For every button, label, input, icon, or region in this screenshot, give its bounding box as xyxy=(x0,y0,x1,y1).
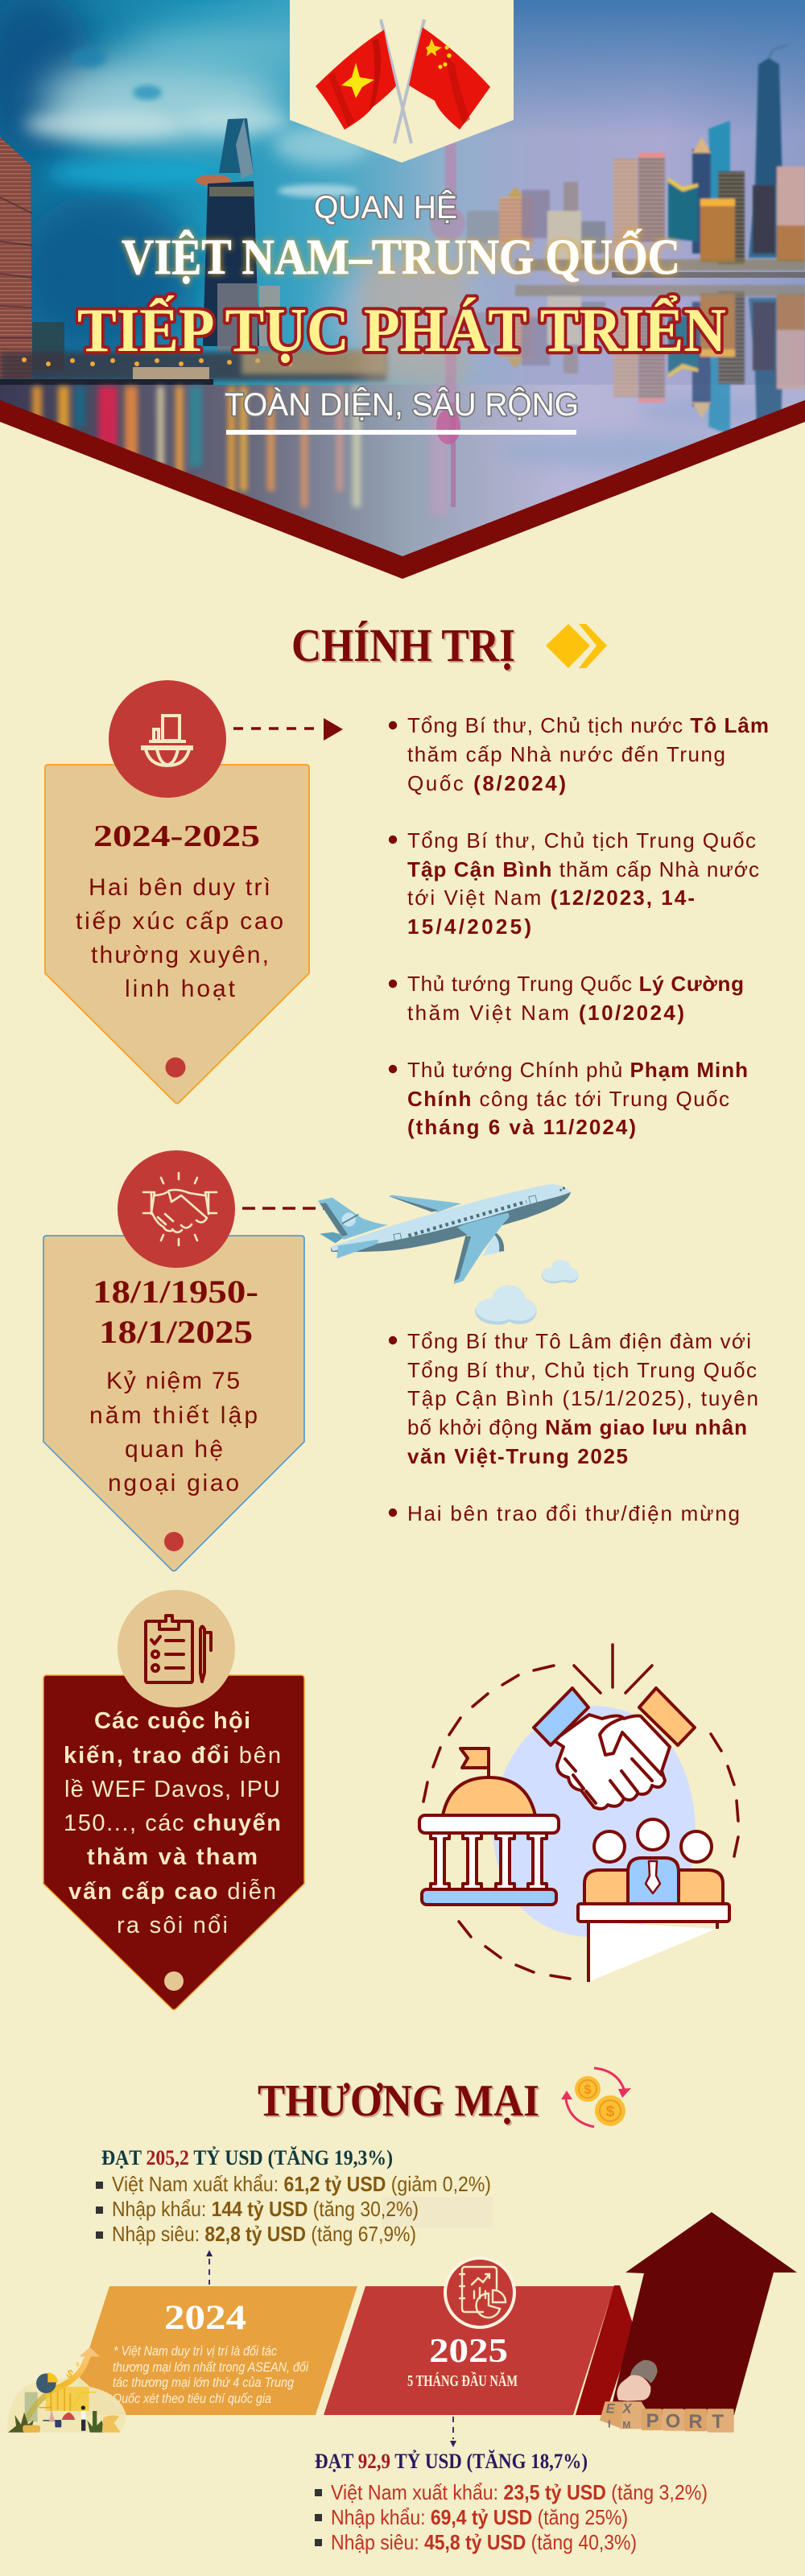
footnote: tác thương mại lớn thứ 4 của Trung xyxy=(113,2376,295,2390)
card text: vấn cấp cao diễn xyxy=(68,1878,276,1905)
text block: 2024 trade figures xyxy=(96,2146,493,2246)
text block: political visits: Quốc (8/2024) xyxy=(407,771,566,795)
illustration: hand and import cubes: E xyxy=(606,2401,616,2416)
card text: quan hệ xyxy=(125,1436,223,1463)
card heading: 2024-2025 xyxy=(93,819,260,853)
flag poles xyxy=(381,19,424,143)
text block: political visits: (tháng 6 và 11/2024) xyxy=(407,1115,636,1139)
text block: political visits: Tập Cận Bình thăm cấp Nhà nước xyxy=(407,857,759,881)
card text: ra sôi nổi xyxy=(117,1913,228,1938)
card text xyxy=(89,1368,258,1496)
sky clouds xyxy=(0,0,475,378)
dashed ring xyxy=(423,1645,738,1979)
panel: high-level meetings card xyxy=(43,1675,304,2009)
icon: clipboard circle xyxy=(118,1590,235,1707)
panel: 75th anniversary card xyxy=(43,1236,304,1571)
title xyxy=(77,189,726,435)
illustration: hand and import cubes xyxy=(600,2360,734,2433)
text block: political visits: thăm cấp Nhà nước đến Trung xyxy=(407,742,725,766)
2024 total: ĐẠT 205,2 TỶ USD (TĂNG 19,3%) xyxy=(101,2146,393,2169)
people at desk xyxy=(43,2420,61,2421)
text block: political visits: 15/4/2025) xyxy=(407,914,531,939)
right skyline xyxy=(430,45,805,270)
panel: 2024-2025 card xyxy=(45,765,309,1103)
text block: political visits: Chính công tác tới Trung Quốc xyxy=(407,1087,729,1111)
text block: 2025 trade figures xyxy=(315,2450,708,2554)
card text: Các cuộc hội xyxy=(94,1708,250,1734)
text block: anniversary events: Tổng Bí thư, Chủ tịch Trung Quốc xyxy=(407,1358,757,1382)
China flag xyxy=(409,27,490,130)
flag banner xyxy=(290,0,514,163)
text block: anniversary events: bố khởi động Năm giao lưu nhân xyxy=(407,1415,747,1439)
reflection of skyline xyxy=(443,283,805,433)
card text: thường xuyên, xyxy=(91,942,269,968)
panel: 2024 band xyxy=(68,2286,357,2415)
coin pile xyxy=(102,2415,121,2433)
text block: 2024 trade figures: Nhập khẩu: 144 tỷ USD (tăng 30,2%) xyxy=(112,2197,419,2221)
heading: chính trị: CHÍNH TRỊ xyxy=(291,619,515,671)
illustration: hand and import cubes: R xyxy=(688,2411,703,2433)
Bitexco tower xyxy=(196,118,280,352)
card text: Hai bên duy trì xyxy=(89,874,270,901)
hero: city skyline panel xyxy=(0,0,805,570)
icon: coins with arrows xyxy=(561,2068,631,2127)
arrow: up to 2024 figures xyxy=(206,2250,213,2285)
handshake xyxy=(534,1688,695,1809)
arrow: dashed connector xyxy=(233,718,343,741)
text block: anniversary events: Tập Cận Bình (15/1/2025), tuyên xyxy=(407,1386,758,1410)
card text xyxy=(76,874,283,1002)
title line 3: TIẾP TỤC PHÁT TRIỂN xyxy=(77,295,726,365)
2024 label: 2024 xyxy=(164,2299,246,2337)
title line 1: QUAN HỆ xyxy=(314,189,457,225)
heading: thương mại: THƯƠNG MẠI xyxy=(258,2076,539,2126)
card text xyxy=(64,1708,281,1938)
government building xyxy=(419,1748,559,1905)
plants xyxy=(8,2413,34,2433)
illustration: hand and import cubes: T xyxy=(712,2411,724,2433)
illustration: diplomacy xyxy=(419,1645,738,1982)
2025 sublabel: 5 THÁNG ĐẦU NĂM xyxy=(407,2371,518,2390)
text block: 2025 trade figures: Nhập siêu: 45,8 tỷ USD (tăng 40,3%) xyxy=(331,2530,637,2554)
delegates at podium xyxy=(578,1819,729,1982)
card text: ngoại giao xyxy=(108,1470,239,1496)
crossed flags xyxy=(316,19,490,143)
arrow: dashed connector to plane xyxy=(242,1207,324,1210)
left bank lights xyxy=(0,266,467,386)
title line 4: TOÀN DIỆN, SÂU RỘNG xyxy=(225,386,579,423)
icon: coins with arrows: $ xyxy=(606,2103,615,2120)
icon: report circle xyxy=(445,2258,514,2327)
Vietnam flag xyxy=(316,30,396,130)
card text: kiến, trao đổi bên xyxy=(64,1743,281,1769)
illustration: finance team xyxy=(7,2347,126,2433)
card heading xyxy=(93,1274,258,1350)
large cloud xyxy=(475,1286,537,1325)
text block: 2025 trade figures: Việt Nam xuất khẩu: 23,5 tỷ USD (tăng 3,2%) xyxy=(331,2480,708,2504)
arrow: dark growth arrow xyxy=(609,2212,797,2415)
card text: 150..., các chuyến xyxy=(64,1810,281,1836)
text block: 2025 trade figures: Nhập khẩu: 69,4 tỷ USD (tăng 25%) xyxy=(331,2505,628,2529)
card heading: 18/1/2025 xyxy=(99,1314,253,1350)
illustration: hand and import cubes: P xyxy=(646,2410,659,2432)
text block: political visits: Tổng Bí thư, Chủ tịch Trung Quốc xyxy=(407,828,756,852)
chevron border xyxy=(0,400,805,579)
icon: yellow diamond chevrons xyxy=(546,624,607,668)
illustration: airplane xyxy=(318,1184,578,1325)
text block: 2024 trade figures: Việt Nam xuất khẩu: 61,2 tỷ USD (giảm 0,2%) xyxy=(112,2172,491,2196)
icon: red circle bridge chart xyxy=(109,680,226,798)
text block: anniversary events xyxy=(389,1329,758,1525)
icon: handshake circle xyxy=(118,1150,235,1268)
card heading: 18/1/1950- xyxy=(93,1274,258,1310)
footnote xyxy=(113,2344,309,2406)
background blob xyxy=(493,1706,696,1937)
illustration: hand and import cubes: O xyxy=(666,2411,680,2433)
illustration: hand and import cubes: X xyxy=(621,2401,632,2416)
text block: political visits: thăm Việt Nam (10/2024) xyxy=(407,1001,684,1025)
illustration: hand and import cubes: M xyxy=(622,2420,630,2431)
card text: năm thiết lập xyxy=(89,1402,258,1429)
card text: lề WEF Davos, IPU xyxy=(64,1777,280,1802)
text block: anniversary events: văn Việt-Trung 2025 xyxy=(407,1444,628,1468)
text block: political visits xyxy=(389,713,769,1139)
footnote: Quốc xét theo tiêu chí quốc gia xyxy=(113,2392,271,2406)
text block: political visits: Thủ tướng Trung Quốc Lý Cường xyxy=(407,972,744,996)
card text: thăm và tham xyxy=(87,1844,258,1870)
title line 2: VIỆT NAM–TRUNG QUỐC xyxy=(122,229,680,285)
arrow: down to 2025 figures xyxy=(450,2417,456,2447)
panel: 2025 band xyxy=(324,2286,614,2415)
card text: tiếp xúc cấp cao xyxy=(76,908,283,935)
footnote: thương mại lớn nhất trong ASEAN, đối xyxy=(113,2360,309,2375)
text block: anniversary events: Hai bên trao đổi thư/điện mừng xyxy=(407,1501,740,1525)
2025 total: ĐẠT 92,9 TỶ USD (TĂNG 18,7%) xyxy=(315,2450,588,2473)
water xyxy=(0,385,805,570)
text block: political visits: tới Việt Nam (12/2023, 14- xyxy=(407,886,695,910)
2025 label: 2025 xyxy=(429,2333,508,2370)
text block: anniversary events: Tổng Bí thư Tô Lâm điện đàm với xyxy=(407,1329,751,1353)
card text: linh hoạt xyxy=(125,976,236,1002)
small cloud xyxy=(542,1260,578,1283)
illustration: finance team: $ xyxy=(76,2360,79,2368)
text block: political visits: Tổng Bí thư, Chủ tịch nước Tô Lâm xyxy=(407,713,769,737)
illustration: finance team: $ xyxy=(65,2367,75,2380)
left building xyxy=(0,137,64,378)
illustration: hand and import cubes: I xyxy=(608,2417,611,2429)
footnote: * Việt Nam duy trì vị trí là đối tác xyxy=(114,2344,278,2359)
text block: 2024 trade figures: Nhập siêu: 82,8 tỷ USD (tăng 67,9%) xyxy=(112,2222,416,2246)
dark red fold xyxy=(576,2285,634,2415)
icon: coins with arrows: $ xyxy=(584,2083,592,2097)
text block: political visits: Thủ tướng Chính phủ Phạm Minh xyxy=(407,1058,748,1082)
card text: Kỷ niệm 75 xyxy=(106,1368,240,1394)
